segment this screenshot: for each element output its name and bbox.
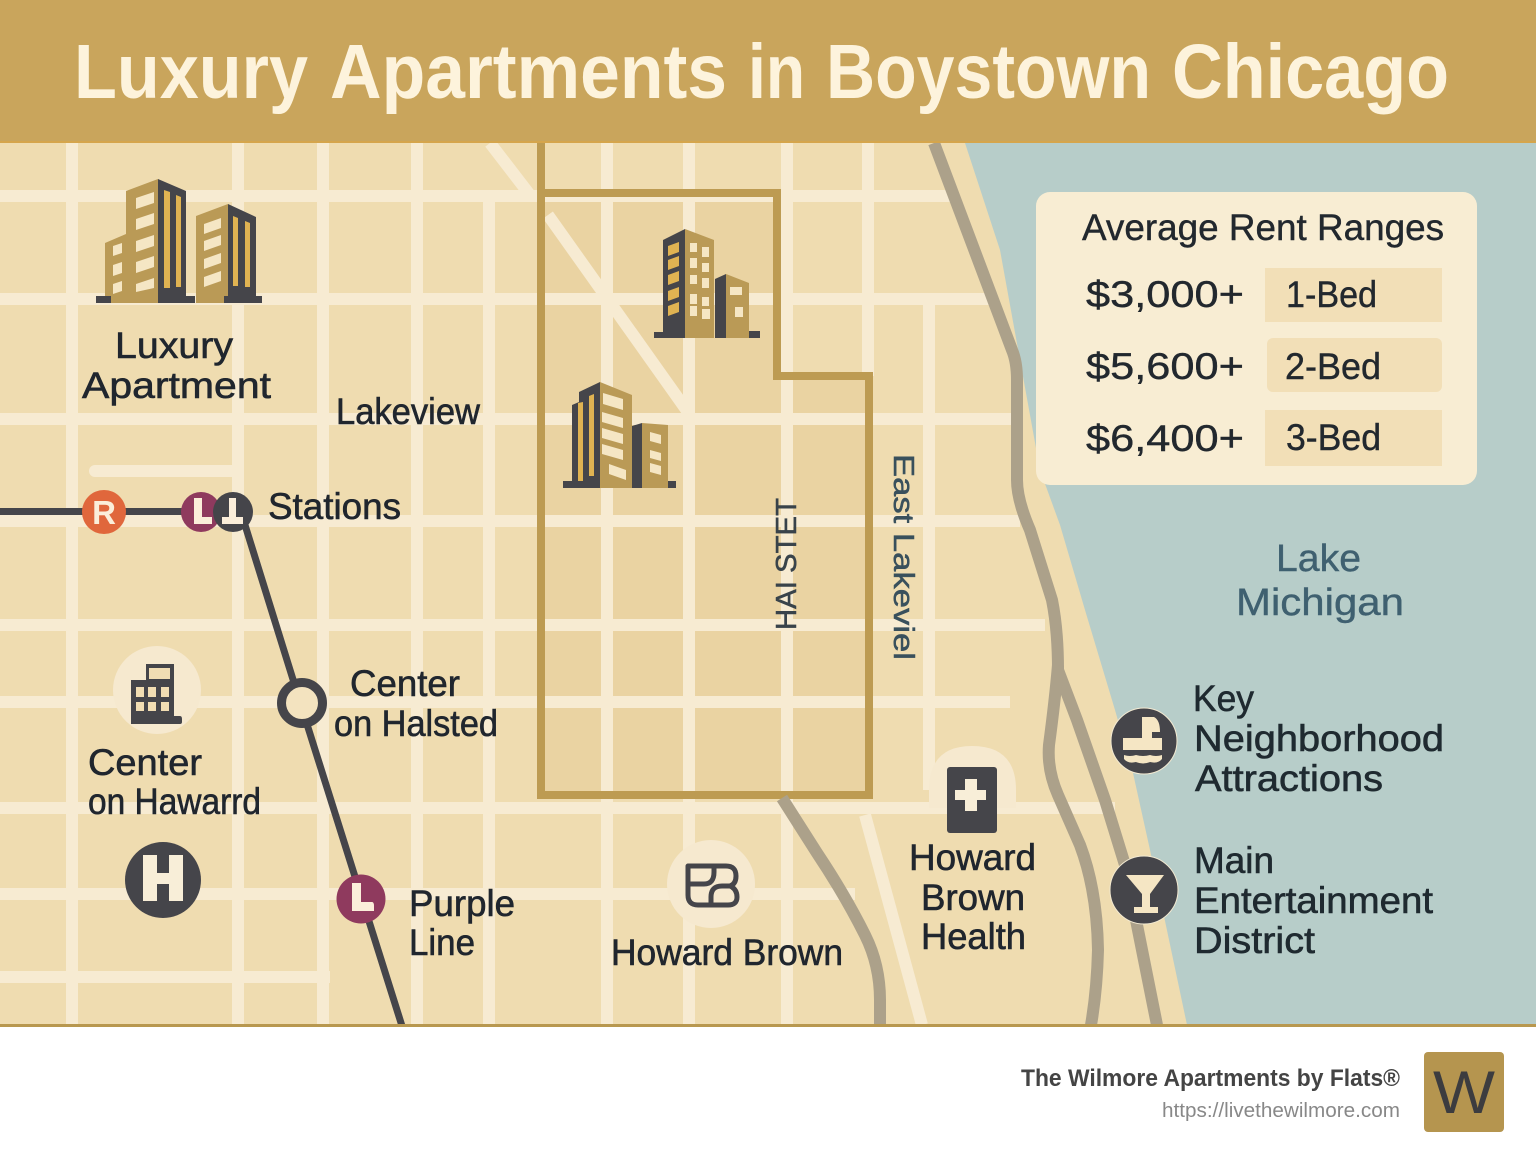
label: key neighborhood attractions: Neighborhood <box>1194 718 1444 759</box>
label: purple line: Purple <box>409 883 515 924</box>
icon: tall building north <box>654 229 760 338</box>
label: main entertainment district: Main <box>1194 840 1274 881</box>
label: lake michigan: Lake <box>1276 538 1361 580</box>
label: center on halsted <box>334 663 498 744</box>
station: R: R <box>92 494 116 531</box>
header band <box>0 0 1536 143</box>
icon: luxury apartment towers <box>96 179 262 303</box>
label: center on halsted: on Halsted <box>334 703 498 744</box>
icon: cocktail glass <box>1110 856 1178 924</box>
label: luxury apartment <box>82 325 272 406</box>
label: key neighborhood attractions: Attractions <box>1195 758 1383 799</box>
label: center on hawarrd: on Hawarrd <box>88 781 261 822</box>
station: R <box>82 490 126 534</box>
label: main entertainment district <box>1194 840 1434 961</box>
label: luxury apartment: Apartment <box>82 365 272 406</box>
footer <box>0 1024 1536 1154</box>
street label: hai stet: HAI STET <box>771 498 803 630</box>
panel heading: Average Rent Ranges <box>1082 207 1444 248</box>
label: purple line <box>409 883 515 963</box>
station ring: center on halsted <box>282 682 322 724</box>
row: 1-bed: 1-Bed <box>1286 274 1377 315</box>
label: key neighborhood attractions: Key <box>1193 678 1254 719</box>
icon: medical cross <box>929 746 1016 833</box>
label: howard brown health <box>909 837 1036 957</box>
row: 3-bed <box>1086 410 1442 466</box>
row: 2-bed: $5,600+ <box>1086 346 1244 387</box>
panel: average rent ranges <box>1036 192 1477 485</box>
transit line <box>0 512 402 1026</box>
row: 3-bed: $6,400+ <box>1086 418 1244 459</box>
street label: east lakeview: East Lakeviel <box>887 454 919 660</box>
label: howard brown health: Brown <box>921 877 1025 918</box>
title: in <box>748 29 805 115</box>
label: lake michigan <box>1236 538 1404 624</box>
icon: tall building west <box>563 382 676 488</box>
lakefront drive <box>782 143 1157 1025</box>
lake <box>965 143 1536 1025</box>
district fill <box>541 193 869 795</box>
row: 2-bed <box>1086 338 1442 392</box>
label: center on hawarrd: Center <box>88 742 202 783</box>
station: dark L <box>213 492 253 532</box>
boystown district boundary <box>541 143 869 795</box>
label: luxury apartment: Luxury <box>115 325 234 366</box>
row: 2-bed: 2-Bed <box>1285 346 1381 387</box>
footer logo <box>1424 1052 1504 1132</box>
label: center on hawarrd <box>88 742 261 822</box>
title: Apartments <box>330 29 727 115</box>
icon: H marker <box>125 842 201 918</box>
label: purple line: Line <box>409 922 475 963</box>
label: howard brown health: Howard <box>909 837 1036 878</box>
footer url: https://livethewilmore.com <box>1162 1100 1400 1122</box>
row: 1-bed <box>1086 268 1442 322</box>
icon: center on howard building <box>113 646 201 734</box>
label: center on halsted: Center <box>350 663 460 704</box>
map background <box>0 142 1536 1026</box>
row: 1-bed: $3,000+ <box>1086 274 1244 315</box>
title: Chicago <box>1172 29 1449 115</box>
icon: attractions boat <box>1111 708 1177 774</box>
row: 3-bed: 3-Bed <box>1286 417 1381 458</box>
label: key neighborhood attractions <box>1193 678 1444 799</box>
label: howard brown: Howard Brown <box>611 932 843 973</box>
label: main entertainment district: District <box>1194 920 1316 961</box>
label: howard brown health: Health <box>921 916 1026 957</box>
station: purple line L <box>336 874 386 924</box>
label: lakeview: Lakeview <box>336 391 480 432</box>
title: Boystown <box>826 29 1151 115</box>
footer brand name: The Wilmore Apartments by Flats® <box>1021 1065 1400 1092</box>
street grid <box>0 143 1115 1025</box>
title: Luxury <box>74 29 308 115</box>
station: purple L <box>181 492 221 532</box>
label: lake michigan: Michigan <box>1236 582 1404 624</box>
icon: howard brown logo <box>667 840 755 928</box>
label: main entertainment district: Entertainment <box>1194 880 1434 921</box>
footer logo: W <box>1433 1059 1495 1126</box>
label: stations: Stations <box>268 486 401 527</box>
